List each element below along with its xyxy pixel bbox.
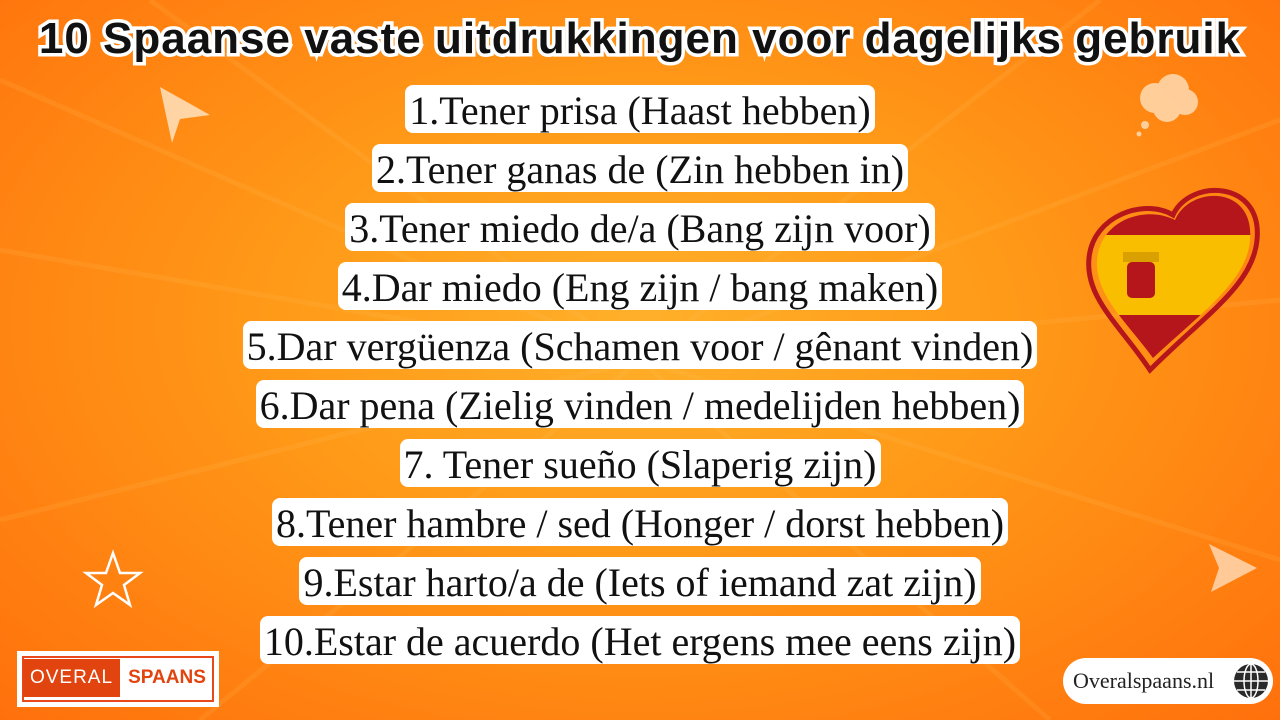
item 4: 4.Dar miedo (Eng zijn / bang maken) — [342, 265, 938, 310]
item 10: 10.Estar de acuerdo (Het ergens mee eens zijn) — [264, 619, 1016, 664]
title: 10 Spaanse vaste uitdrukkingen voor dagelijks gebruik — [39, 14, 1241, 63]
item 8: 8.Tener hambre / sed (Honger / dorst hebben) — [276, 501, 1004, 546]
icon: paper plane right — [1209, 544, 1257, 592]
logo: Overal Spaans — [17, 651, 219, 707]
icon: star left — [82, 549, 144, 608]
item 5: 5.Dar vergüenza (Schamen voor / gênant vinden) — [247, 324, 1033, 369]
website badge — [1063, 658, 1273, 704]
item 1: 1.Tener prisa (Haast hebben) — [409, 88, 871, 133]
item 6: 6.Dar pena (Zielig vinden / medelijden hebben) — [260, 383, 1020, 428]
icon: globe — [1234, 664, 1268, 698]
logo: Overal Spaans: SPAANS — [128, 667, 206, 688]
item 2: 2.Tener ganas de (Zin hebben in) — [376, 147, 904, 192]
logo: Overal Spaans: OVERAL — [30, 667, 113, 688]
item 3: 3.Tener miedo de/a (Bang zijn voor) — [349, 206, 931, 251]
website badge: Overalspaans.nl — [1073, 668, 1214, 693]
item 9: 9.Estar harto/a de (Iets of iemand zat zijn) — [303, 560, 977, 605]
item 7: 7. Tener sueño (Slaperig zijn) — [404, 442, 876, 487]
icon: paper plane left — [160, 87, 210, 143]
icon: heart flag — [1086, 188, 1260, 374]
icon: thought cloud — [1136, 74, 1198, 136]
